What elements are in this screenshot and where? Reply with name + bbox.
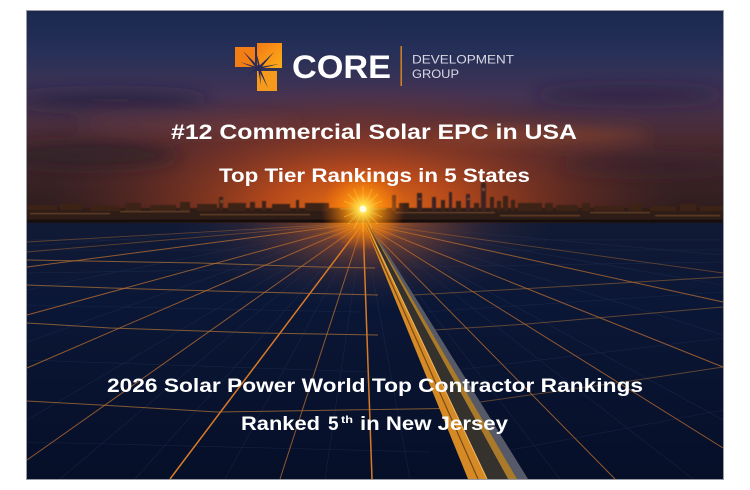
logo: [235, 43, 515, 91]
logo divider: [400, 46, 402, 86]
text: New Jersey rank: Ranked: [241, 414, 320, 435]
logo wordmark: CORE: [292, 49, 391, 85]
heading: national rank: #12 Commercial Solar EPC in USA: [171, 120, 577, 144]
text: New Jersey rank: 5: [328, 414, 339, 435]
orange radial lines: [27, 223, 723, 479]
text: New Jersey rank: th: [341, 414, 353, 426]
orange cross lines: [27, 260, 723, 412]
text: New Jersey rank: in New Jersey: [360, 414, 508, 435]
logo subtitle: GROUP: [412, 67, 459, 81]
text: New Jersey rank: [241, 414, 508, 435]
central rail: [364, 223, 528, 479]
solar panel field: [27, 223, 723, 479]
subheading: state rankings: Top Tier Rankings in 5 States: [219, 166, 530, 187]
city lights: [30, 188, 720, 216]
sunset sky: [0, 11, 740, 223]
logo subtitle: [412, 52, 515, 81]
sun: [322, 171, 404, 249]
city skyline: [27, 178, 723, 223]
logo subtitle: DEVELOPMENT: [412, 52, 515, 66]
text: contractor rankings: 2026 Solar Power World Top Contractor Rankings: [107, 376, 643, 397]
faint panel grid: [27, 223, 723, 479]
logo mark: [235, 43, 282, 91]
